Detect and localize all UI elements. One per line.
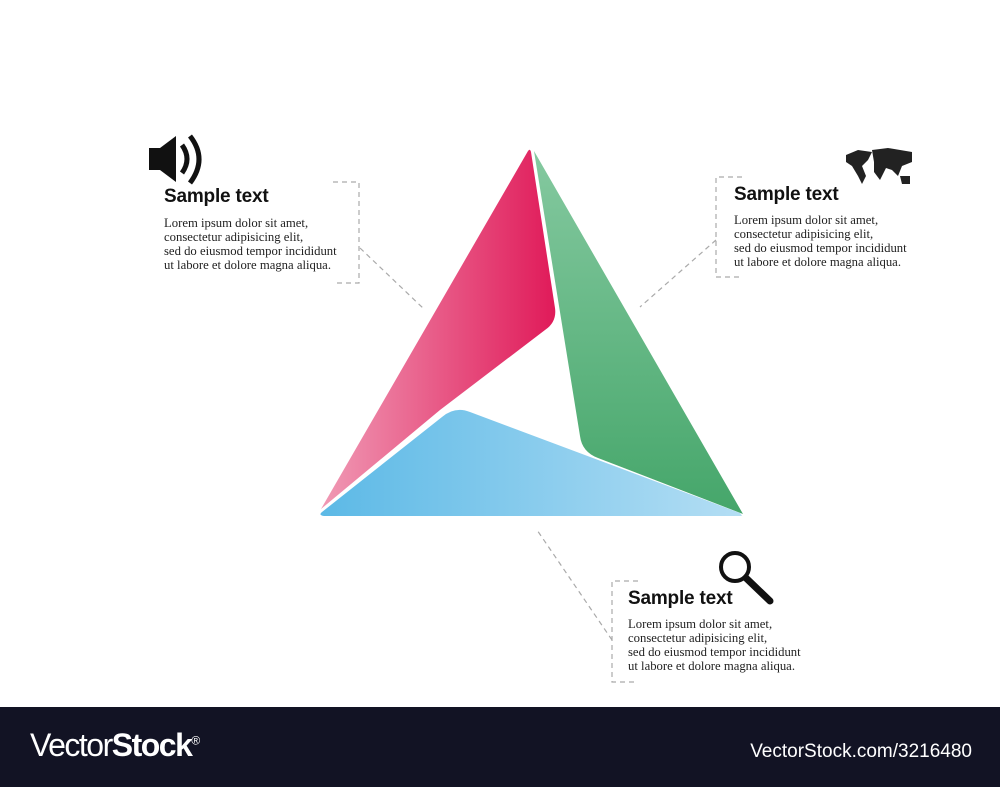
shape: blue bbox=[320, 410, 742, 516]
text block: left: Sample text bbox=[164, 186, 268, 207]
text block: bottom: sed do eiusmod tempor incididunt bbox=[628, 645, 801, 659]
shape: green bbox=[534, 151, 743, 514]
text block: right bbox=[734, 184, 907, 269]
text block: right: sed do eiusmod tempor incididunt bbox=[734, 241, 907, 255]
text block: left: Lorem ipsum dolor sit amet, bbox=[164, 216, 308, 230]
icon: speaker bbox=[149, 136, 199, 183]
shape: red bbox=[321, 150, 555, 509]
text block: left: consectetur adipisicing elit, bbox=[164, 230, 303, 244]
text block: left bbox=[164, 186, 337, 272]
icon: magnifier bbox=[721, 553, 770, 601]
text block: bottom bbox=[628, 588, 801, 673]
text block: bottom: Lorem ipsum dolor sit amet, bbox=[628, 617, 772, 631]
text block: bottom: ut labore et dolore magna aliqua. bbox=[628, 659, 795, 673]
text block: right: Sample text bbox=[734, 184, 838, 205]
text block: left: ut labore et dolore magna aliqua. bbox=[164, 258, 331, 272]
url: VectorStock.com/3216480 bbox=[750, 741, 972, 762]
logo: VectorStock® bbox=[30, 727, 199, 763]
text block: bottom: consectetur adipisicing elit, bbox=[628, 631, 767, 645]
icon: world map bbox=[846, 148, 912, 184]
footer bbox=[0, 707, 1000, 787]
text block: right: Lorem ipsum dolor sit amet, bbox=[734, 213, 878, 227]
text block: left: sed do eiusmod tempor incididunt bbox=[164, 244, 337, 258]
text block: right: consectetur adipisicing elit, bbox=[734, 227, 873, 241]
text block: right: ut labore et dolore magna aliqua. bbox=[734, 255, 901, 269]
text block: bottom: Sample text bbox=[628, 588, 732, 609]
